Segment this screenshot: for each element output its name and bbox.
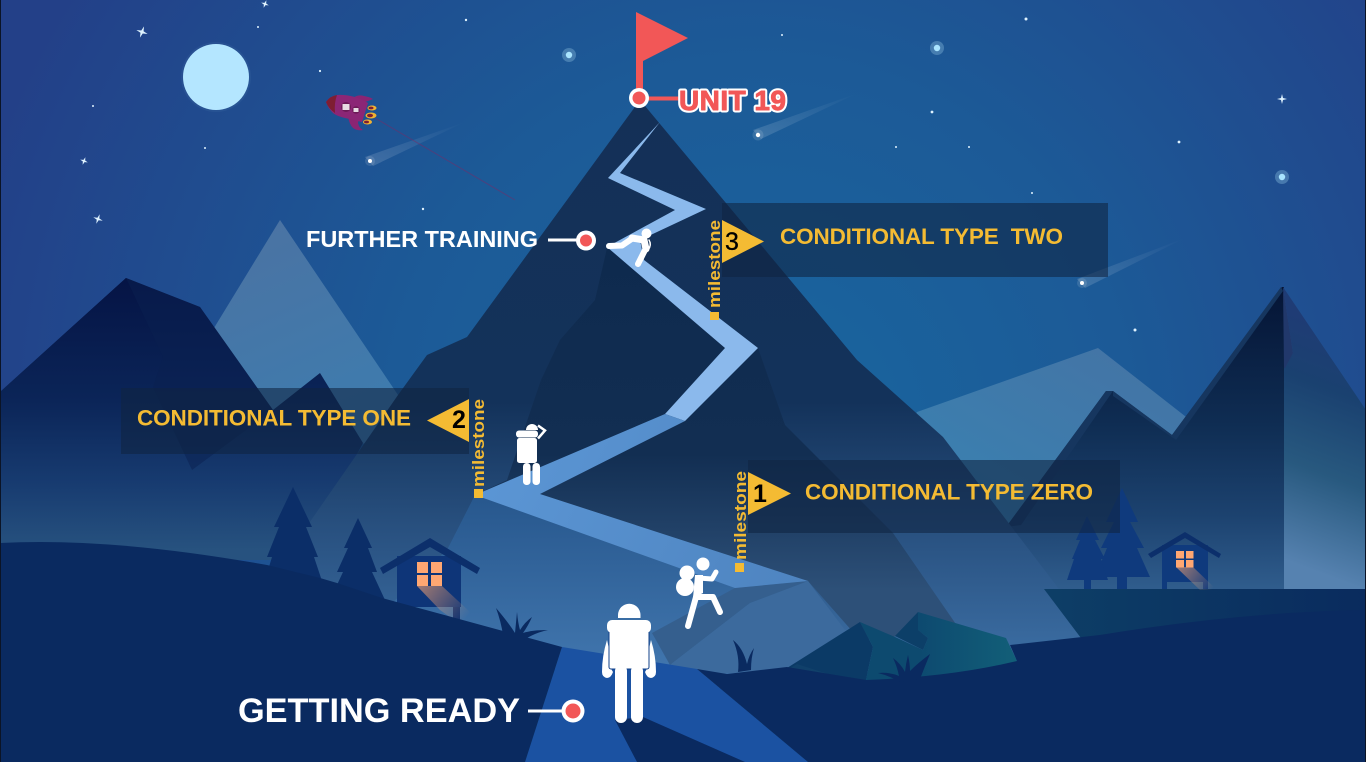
icon: hiker with backpack (516, 424, 545, 485)
stars (79, 0, 1287, 332)
marker: further training (548, 230, 596, 250)
right pine trees (1067, 488, 1150, 589)
teal mounds (770, 612, 1017, 680)
right foreground hill (697, 610, 1366, 762)
icon: climbing backpacker (676, 558, 720, 626)
flag 2: 2 (452, 406, 466, 434)
milestone 3 label: milestone (705, 220, 724, 308)
panel: conditional type two (722, 203, 1108, 277)
glowing planets (562, 41, 1289, 184)
flag 3: 3 (725, 228, 739, 256)
dark mountain left (0, 278, 363, 560)
shooting stars (365, 93, 1185, 288)
flag 2 (427, 399, 469, 442)
panel: conditional type zero (748, 460, 1120, 533)
road shadow wedge (615, 717, 745, 762)
mountain foot slope (385, 495, 808, 680)
left pine trees (262, 487, 385, 600)
milestone 1 label: milestone (731, 471, 750, 560)
foreground road (525, 647, 808, 762)
label: CONDITIONAL TYPE ZERO (805, 480, 1093, 504)
icon: summit flag (636, 12, 688, 100)
main mountain (280, 100, 1100, 690)
back light mountain left (214, 220, 420, 470)
rocket (326, 95, 515, 200)
flag 1: 1 (753, 480, 767, 508)
moon (181, 42, 251, 112)
right distant mountains (1004, 287, 1366, 590)
panel: conditional type one (121, 388, 469, 454)
right ground band (1044, 589, 1366, 650)
icon: crawling climber (609, 228, 652, 264)
title: unit 19: UNIT 19 (679, 85, 786, 116)
flag 1 (748, 472, 791, 515)
flag 3 (722, 220, 764, 263)
lower ridge facets (652, 581, 862, 676)
label: further training: FURTHER TRAINING (306, 226, 538, 252)
label: CONDITIONAL TYPE TWO (780, 224, 1063, 249)
label: getting ready: GETTING READY (238, 692, 520, 730)
grass tufts (496, 608, 930, 682)
marker: unit 19 (629, 88, 649, 108)
right cabin (1148, 532, 1221, 590)
label: CONDITIONAL TYPE ONE (137, 406, 411, 430)
icon: large hiker (602, 604, 656, 723)
climbing path (475, 122, 808, 588)
main mountain inner facet (475, 248, 960, 640)
title: unit 19: UNIT 19 (679, 85, 786, 116)
back light mountain right (900, 348, 1190, 540)
marker: getting ready (528, 700, 584, 722)
milestone 2 label: milestone (469, 399, 488, 487)
left cabin (380, 538, 480, 625)
left foreground hill (0, 542, 562, 762)
